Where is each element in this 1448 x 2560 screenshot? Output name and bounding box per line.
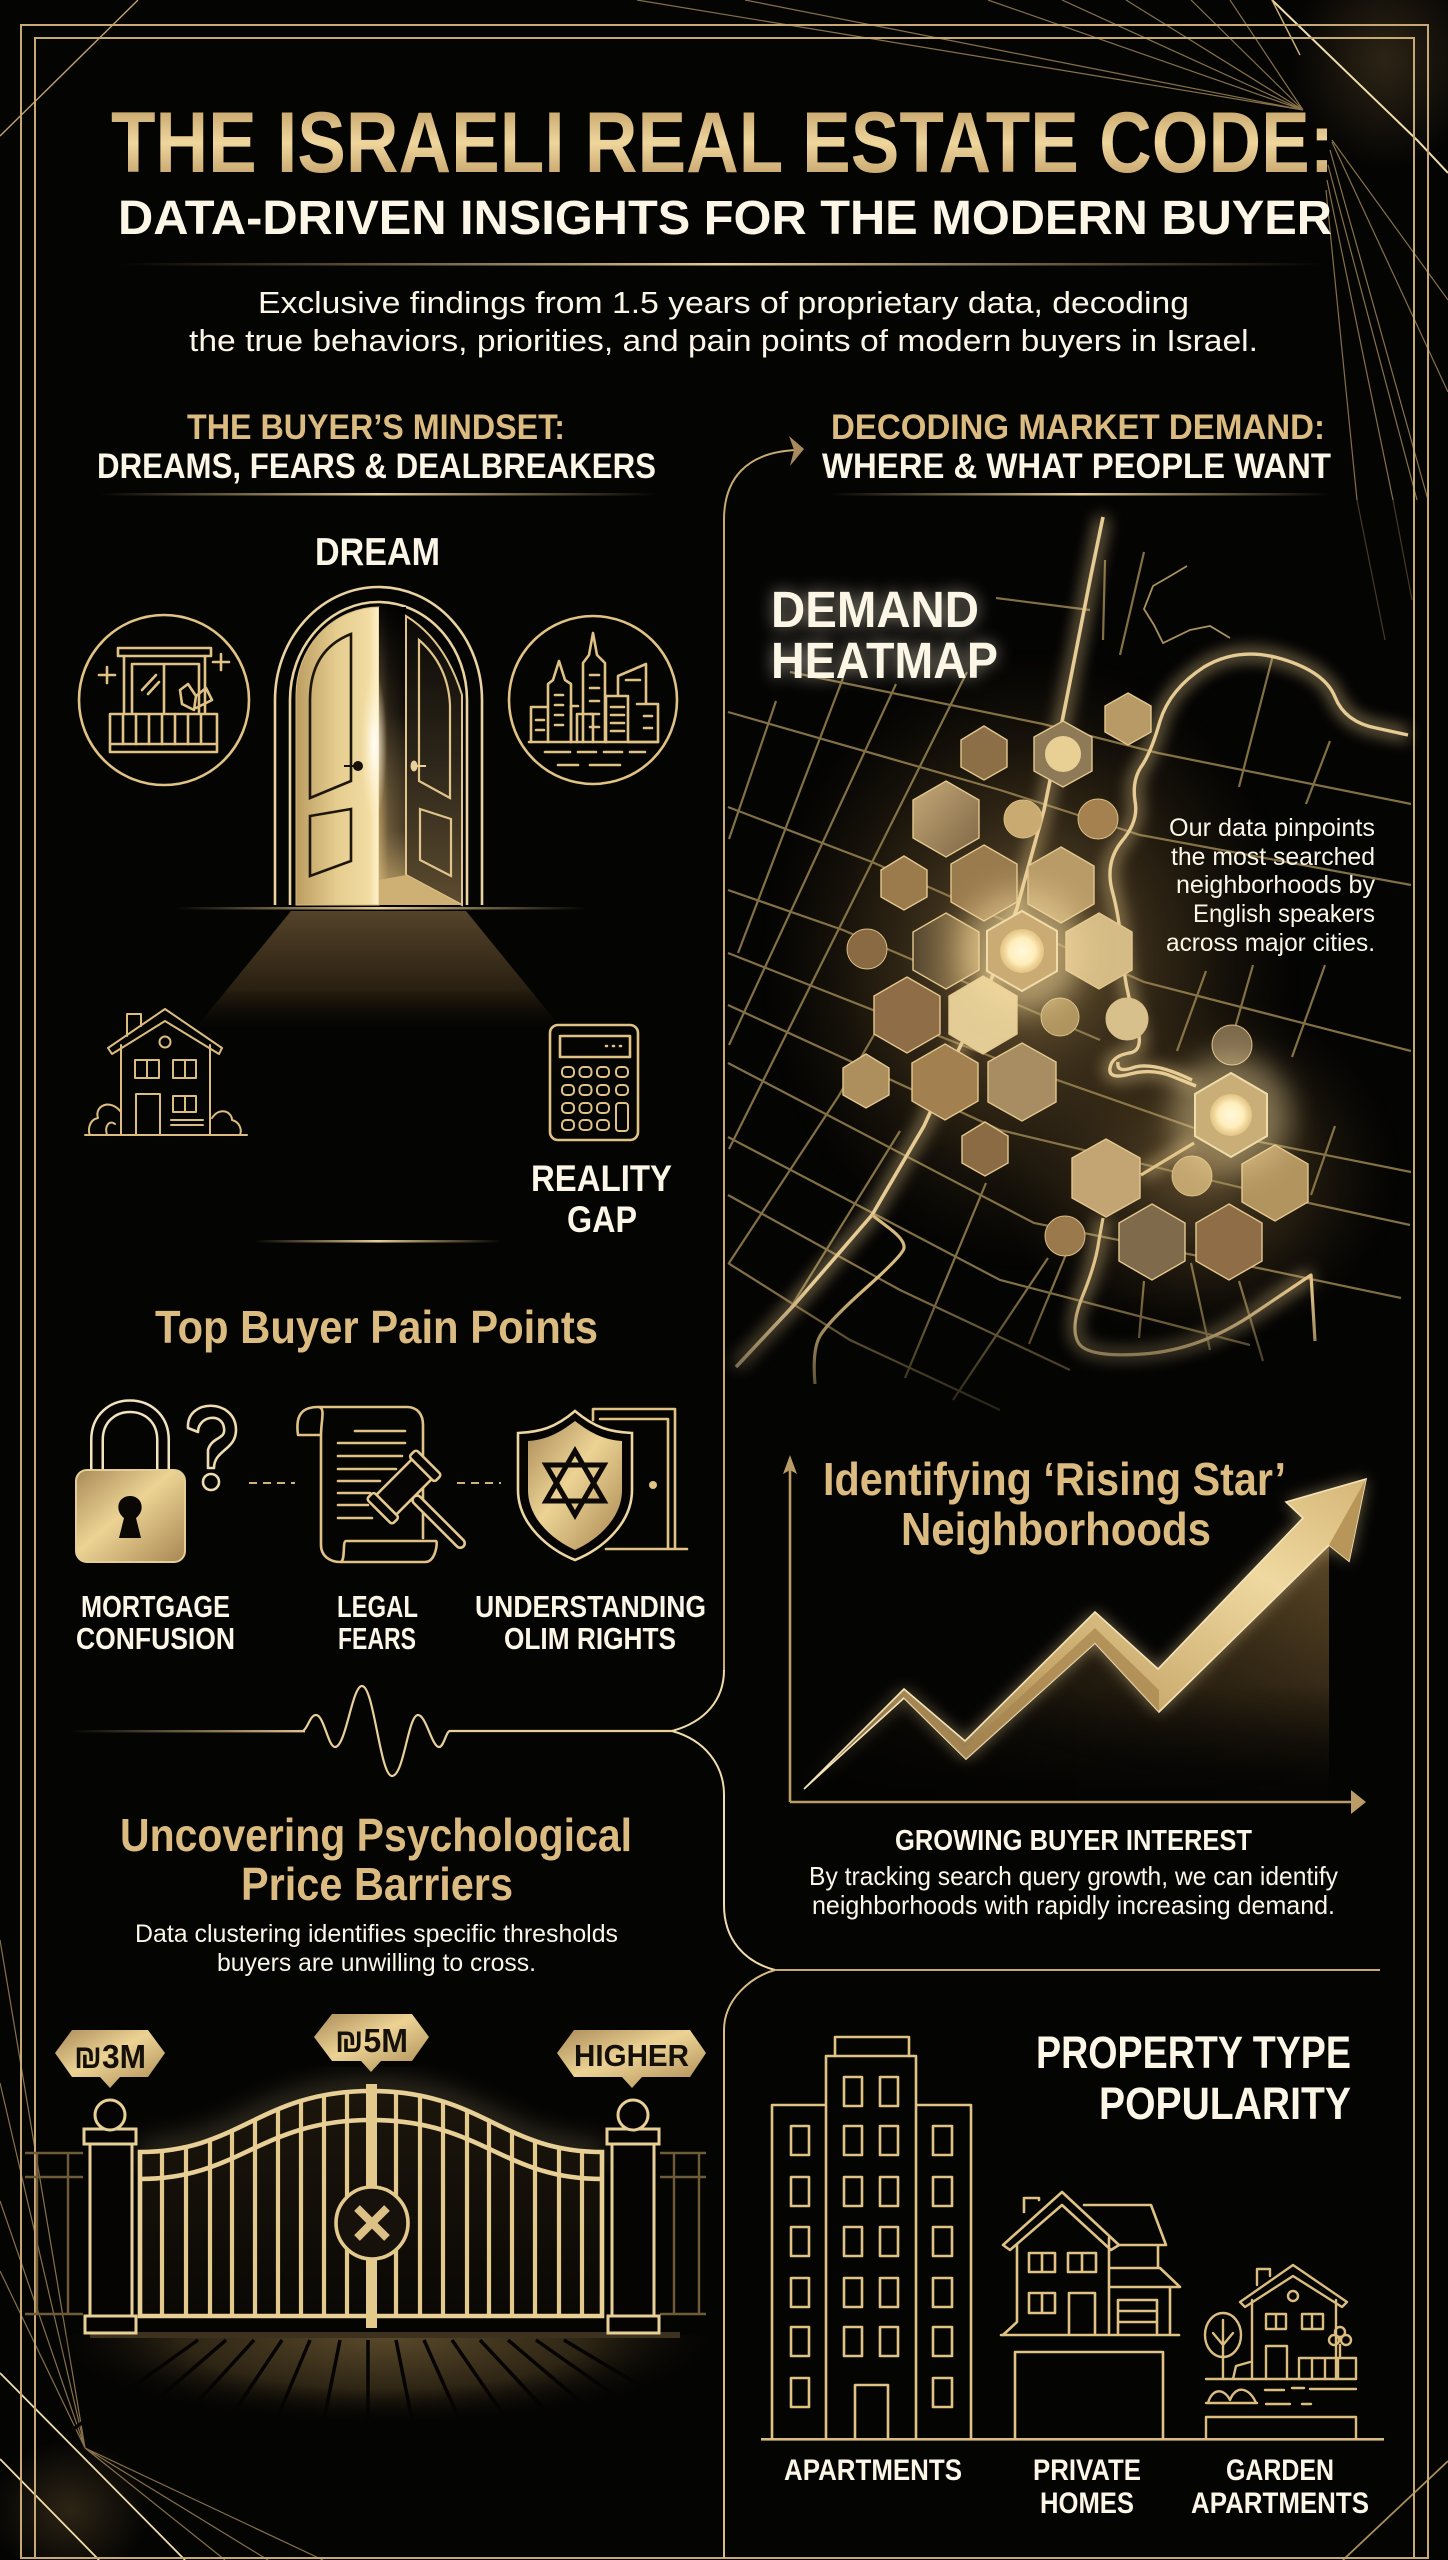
price tag: 3M: ₪3M: [74, 2038, 146, 2075]
dream label: DREAM: [315, 531, 440, 574]
property labels: [784, 2454, 1369, 2520]
icon: legal scroll and gavel: [297, 1407, 488, 1571]
price tag: 5M: [314, 2014, 429, 2072]
reality gap label: GAP: [567, 1199, 637, 1240]
street grid: [728, 552, 1411, 1410]
heatmap description: across major cities.: [1166, 929, 1375, 957]
growing buyer interest text: neighborhoods with rapidly increasing demand.: [812, 1890, 1335, 1920]
area under line: [1008, 1546, 1329, 1764]
intro text: Exclusive findings from 1.5 years of proprietary data, decoding: [258, 285, 1189, 320]
rising star heading: Identifying ‘Rising Star’: [823, 1453, 1286, 1505]
heatmap description: English speakers: [1193, 900, 1375, 928]
connector dashes: [249, 1482, 501, 1484]
heading: psychological price barriers: [120, 1809, 632, 1910]
property labels: PRIVATE: [1033, 2454, 1141, 2487]
heatmap description: Our data pinpoints: [1169, 814, 1375, 842]
property labels: APARTMENTS: [1191, 2487, 1369, 2520]
rising star heading: [823, 1453, 1286, 1555]
light beam from door: [194, 911, 563, 1030]
price barriers description: buyers are unwilling to cross.: [217, 1949, 536, 1977]
pulse line: [69, 1686, 672, 1776]
heatmap title: HEATMAP: [771, 632, 998, 689]
icon: apartment tower: [772, 2037, 971, 2439]
property labels: HOMES: [1040, 2487, 1134, 2520]
pain point labels: CONFUSION: [76, 1621, 235, 1656]
branch road: [814, 1215, 904, 1384]
title: [111, 95, 1334, 245]
demand heatmap: [728, 517, 1411, 1410]
heading: psychological price barriers: Price Barriers: [241, 1858, 513, 1910]
pain point labels: MORTGAGE: [81, 1589, 230, 1624]
section heading: market demand: [822, 408, 1331, 486]
section heading: market demand: WHERE & WHAT PEOPLE WANT: [822, 447, 1331, 486]
heading: psychological price barriers: Uncovering Psychological: [120, 1809, 632, 1861]
property type heading: [1036, 2027, 1351, 2129]
ground: [45, 2332, 725, 2430]
property ground line: [761, 2438, 1384, 2441]
icon: shield with star and door: [518, 1409, 687, 1560]
section heading: buyer's mindset: THE BUYER’S MINDSET:: [187, 408, 565, 447]
icon: city skyline in circle: [509, 616, 677, 784]
glow: [804, 1479, 1366, 1789]
price tag: 3M: [55, 2030, 165, 2088]
icon: private home: [1001, 2192, 1180, 2439]
hotspot glow: [960, 889, 1084, 1013]
price tag: higher: HIGHER: [574, 2038, 689, 2073]
icon: calculator: [550, 1025, 638, 1140]
gate illustration: [25, 2084, 725, 2430]
price tag: higher: [557, 2030, 706, 2088]
rising arrow: [804, 1479, 1366, 1789]
hotspot hexes: [987, 911, 1057, 991]
property labels: APARTMENTS: [784, 2454, 962, 2487]
heatmap title: DEMAND: [771, 581, 979, 638]
right pillar: [607, 2100, 659, 2333]
icon: garden apartment: [1205, 2265, 1356, 2439]
section heading: market demand: DECODING MARKET DEMAND:: [831, 408, 1325, 447]
heatmap title: [771, 581, 998, 689]
subtitle: DATA-DRIVEN INSIGHTS FOR THE MODERN BUYER: [118, 192, 1332, 245]
property type heading: PROPERTY TYPE: [1036, 2027, 1351, 2078]
section heading: buyer's mindset: DREAMS, FEARS & DEALBREAKERS: [97, 447, 656, 486]
heatmap title: HEATMAP: [771, 632, 998, 689]
intro text: [189, 285, 1258, 358]
reality gap label: REALITY: [531, 1158, 672, 1199]
growing buyer interest text: [809, 1825, 1338, 1920]
heatmap title: DEMAND: [771, 581, 979, 638]
property labels: GARDEN: [1226, 2454, 1334, 2487]
heatmap description: the most searched: [1171, 843, 1375, 871]
pain point labels: FEARS: [338, 1621, 416, 1656]
price tag: 5M: ₪5M: [335, 2022, 408, 2059]
bright road glow: [736, 517, 1408, 1367]
price barriers description: [135, 1920, 618, 1977]
property type heading: POPULARITY: [1099, 2078, 1351, 2129]
rising star heading: Neighborhoods: [901, 1503, 1211, 1555]
price barriers description: Data clustering identifies specific thresholds: [135, 1920, 618, 1948]
heatmap description: [1166, 814, 1375, 957]
main road: [736, 517, 1103, 1367]
icon: modest house: [85, 1009, 247, 1135]
icon: balcony in circle: [79, 615, 249, 785]
rising star chart: [783, 1455, 1366, 1814]
hexagons: [843, 693, 1308, 1280]
icon: padlock with question mark: [76, 1406, 236, 1562]
icon: open door: [275, 587, 482, 905]
heading: top buyer pain points: Top Buyer Pain Points: [155, 1301, 598, 1353]
thin border line: [1144, 566, 1230, 643]
intro text: the true behaviors, priorities, and pain points of modern buyers in Israel.: [189, 323, 1258, 358]
pain point labels: OLIM RIGHTS: [504, 1621, 676, 1656]
river road: [1110, 654, 1408, 1086]
axes: [783, 1455, 1366, 1814]
circular nodes: [847, 799, 1252, 1256]
reality gap label: [531, 1158, 672, 1240]
connector lines with arrow: [672, 436, 1380, 2558]
pain point labels: [76, 1589, 706, 1656]
section heading: buyer's mindset: [97, 408, 656, 486]
southern road: [1075, 1143, 1315, 1355]
growing buyer interest text: By tracking search query growth, we can identify: [809, 1861, 1338, 1891]
side fences: [25, 2153, 706, 2314]
pain point labels: LEGAL: [337, 1589, 418, 1624]
pain point labels: UNDERSTANDING: [475, 1589, 706, 1624]
growing buyer interest text: GROWING BUYER INTEREST: [895, 1825, 1252, 1857]
left pillar: [84, 2100, 136, 2333]
haze: [798, 693, 1260, 1228]
heatmap description: neighborhoods by: [1176, 871, 1375, 899]
